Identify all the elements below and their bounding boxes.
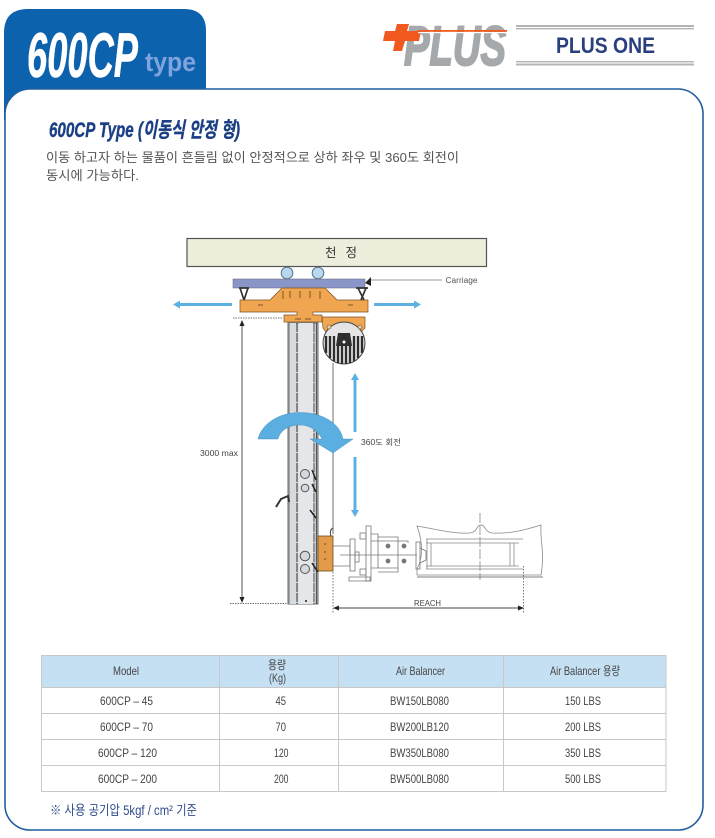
diagram: balancer motor: [323, 322, 365, 364]
diagram: carriage label and pointer: [365, 276, 478, 286]
dimension: reach: REACH: [414, 599, 441, 608]
table: specifications: Air Balancer 용량: [550, 664, 620, 678]
diagram: orange clamp: [318, 528, 333, 571]
table: specifications: Air Balancer: [396, 664, 445, 678]
diagram: cable: [332, 363, 334, 534]
table: specifications: 500 LBS: [565, 772, 601, 786]
table: specifications: BW500LB080: [390, 772, 449, 786]
dimension: 3000 max: 3000 max: [200, 449, 238, 458]
description text: 동시에 가능하다.: [46, 168, 139, 183]
diagram: column: [276, 323, 318, 604]
table: specifications: 600CP – 45: [100, 694, 153, 708]
table: specifications: (Kg): [269, 671, 286, 685]
table: specifications: 350 LBS: [565, 746, 601, 760]
table: specifications: 120: [274, 746, 289, 760]
table: specifications: Model: [113, 664, 139, 678]
table: specifications: [41, 655, 666, 792]
description text: [46, 150, 459, 183]
arrow: left travel: [173, 300, 232, 308]
arrow: right travel: [374, 300, 421, 308]
label: 360 rotation: 360도 회전: [361, 437, 401, 447]
table: specifications: BW350LB080: [390, 746, 449, 760]
section heading: 600CP Type (이동식 안정 형): [49, 119, 240, 142]
diagram: rollers: [281, 267, 324, 279]
table: specifications: 200: [274, 772, 289, 786]
heading: 600CP type: 600CP: [27, 21, 139, 91]
panel: blue header tab: [4, 9, 206, 120]
logo: PLUS: PLUS: [404, 14, 506, 77]
description text: 이동 하고자 하는 물품이 흔들림 없이 안정적으로 상하 좌우 및 360도 회전이: [46, 150, 459, 165]
table: specifications: 용량: [268, 658, 286, 672]
diagram: ceiling: 천 정: [325, 245, 357, 260]
table: specifications: 600CP – 120: [98, 746, 157, 760]
heading: 600CP type: type: [145, 47, 196, 77]
diagram: carriage rail: [233, 279, 365, 288]
dimension: reach: [333, 566, 524, 613]
arrow: vertical movement: [351, 373, 359, 517]
logo: PLUS: [383, 14, 507, 77]
table: specifications: BW150LB080: [390, 694, 449, 708]
table: specifications: 600CP – 200: [98, 772, 157, 786]
diagram: gripper assembly: [333, 526, 426, 581]
table: specifications: 150 LBS: [565, 694, 601, 708]
table: specifications: 45: [276, 694, 286, 708]
table: specifications: BW200LB120: [390, 720, 449, 734]
diagram: ceiling: [187, 238, 486, 266]
diagram: load outline: [417, 513, 543, 580]
diagram: orange trolley body: [239, 288, 368, 332]
diagram: carriage label and pointer: Carriage: [446, 276, 478, 285]
table header row: [41, 655, 666, 688]
arrow: 360 degree rotation: [258, 412, 353, 453]
brand name: PLUS ONE: PLUS ONE: [556, 33, 655, 58]
dimension: 3000 max: [200, 318, 287, 604]
table: specifications: 70: [276, 720, 286, 734]
footnote: ※ 사용 공기압 5kgf / cm² 기준: [50, 803, 197, 818]
table: specifications: 600CP – 70: [100, 720, 153, 734]
table: specifications: 200 LBS: [565, 720, 601, 734]
